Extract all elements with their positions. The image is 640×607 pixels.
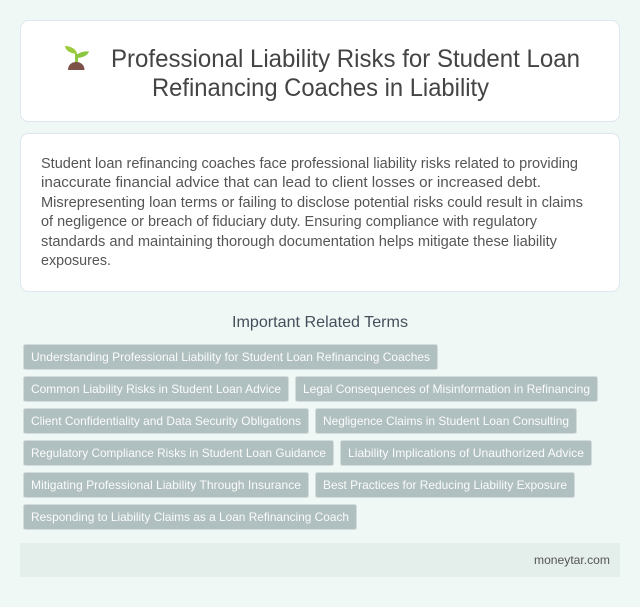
tag: Common Liability Risks in Student Loan Advice	[31, 382, 281, 396]
description text: inaccurate financial advice that can lead to client losses or increased debt.	[41, 175, 541, 191]
tag: Negligence Claims in Student Loan Consulting	[323, 414, 569, 428]
tag: Liability Implications of Unauthorized Advice	[348, 446, 584, 460]
tag	[316, 472, 574, 498]
tag: Legal Consequences of Misinformation in Refinancing	[303, 382, 590, 396]
tag: Client Confidentiality and Data Security Obligations	[31, 414, 301, 428]
tag: Regulatory Compliance Risks in Student Loan Guidance	[31, 446, 326, 460]
title: Refinancing Coaches in Liability	[152, 74, 489, 102]
title	[111, 45, 580, 102]
tag	[24, 440, 334, 466]
icon: seedling	[65, 46, 89, 70]
footer	[20, 543, 620, 577]
description text: Misrepresenting loan terms or failing to disclose potential risks could result in claims	[41, 195, 583, 211]
description text: standards and maintaining thorough documentation helps mitigate these liability	[41, 234, 558, 250]
description text	[41, 156, 583, 269]
footer source text: moneytar.com	[534, 553, 610, 567]
panel: description	[20, 134, 620, 292]
tag: Mitigating Professional Liability Through Insurance	[31, 478, 301, 492]
description text: Student loan refinancing coaches face professional liability risks related to providing	[41, 156, 578, 172]
heading: related terms: Important Related Terms	[232, 314, 408, 331]
tag	[24, 504, 356, 530]
related term tags	[24, 344, 598, 530]
description text: of negligence or breach of fiduciary duty. Ensuring compliance with regulatory	[41, 214, 538, 230]
tag: Understanding Professional Liability for Student Loan Refinancing Coaches	[31, 350, 430, 364]
tag	[296, 376, 598, 402]
tag	[24, 472, 308, 498]
tag: Responding to Liability Claims as a Loan Refinancing Coach	[31, 510, 349, 524]
description text: exposures.	[41, 253, 111, 269]
panel: header	[20, 20, 620, 122]
tag	[340, 440, 592, 466]
title: Professional Liability Risks for Student Loan	[111, 45, 580, 73]
tag	[24, 376, 288, 402]
tag	[316, 408, 576, 434]
tag: Best Practices for Reducing Liability Exposure	[323, 478, 567, 492]
tag	[24, 344, 438, 370]
tag	[24, 408, 308, 434]
